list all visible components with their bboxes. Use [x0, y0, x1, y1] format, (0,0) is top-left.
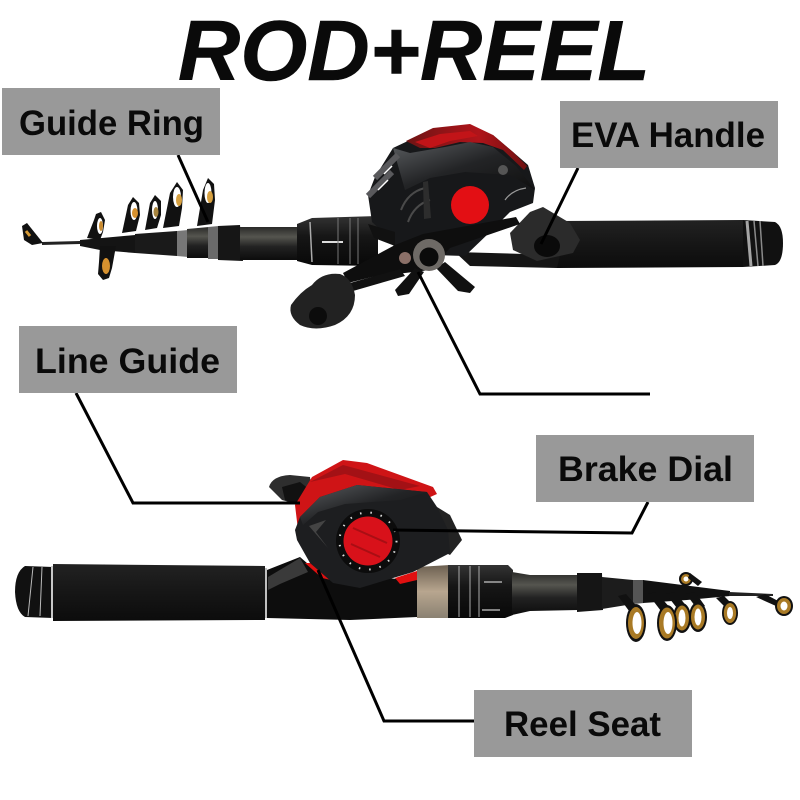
label: Reel Seat	[474, 690, 692, 757]
top rod blank	[42, 216, 378, 266]
leader line: brake dial	[393, 502, 648, 533]
top reel body	[368, 124, 535, 256]
label: Line Guide	[19, 326, 237, 393]
bottom rod guide rings	[618, 572, 793, 642]
top reel red knob	[451, 186, 489, 224]
bottom reel brake dial	[336, 509, 400, 573]
title: ROD+REEL	[178, 4, 650, 99]
bottom reel body	[269, 460, 462, 588]
leader line: guide ring	[178, 155, 208, 222]
bottom rod blank	[448, 565, 773, 618]
top rod guide rings	[22, 178, 215, 280]
label: Guide Ring: Guide Ring	[19, 104, 204, 143]
top rod and reel illustration	[22, 124, 783, 328]
leader line: reel seat	[318, 570, 474, 721]
EVA handle cup	[510, 207, 580, 261]
bottom handle grip	[15, 564, 266, 621]
label: Guide Ring	[2, 88, 220, 155]
top handle grip	[455, 220, 783, 268]
label: Reel Seat: Reel Seat	[504, 705, 661, 744]
leader line: line guide	[76, 393, 300, 503]
label: Line Guide: Line Guide	[35, 342, 220, 381]
top reel handle	[290, 217, 520, 328]
bottom rod and reel illustration	[15, 460, 793, 642]
leader line: unlabelled handle pointer	[418, 272, 650, 394]
label: EVA Handle	[560, 101, 778, 168]
label: Brake Dial	[536, 435, 754, 502]
label: EVA Handle: EVA Handle	[571, 116, 765, 155]
bottom reel seat	[267, 557, 450, 620]
label: Brake Dial: Brake Dial	[558, 450, 733, 489]
leader line: EVA handle	[541, 168, 578, 244]
